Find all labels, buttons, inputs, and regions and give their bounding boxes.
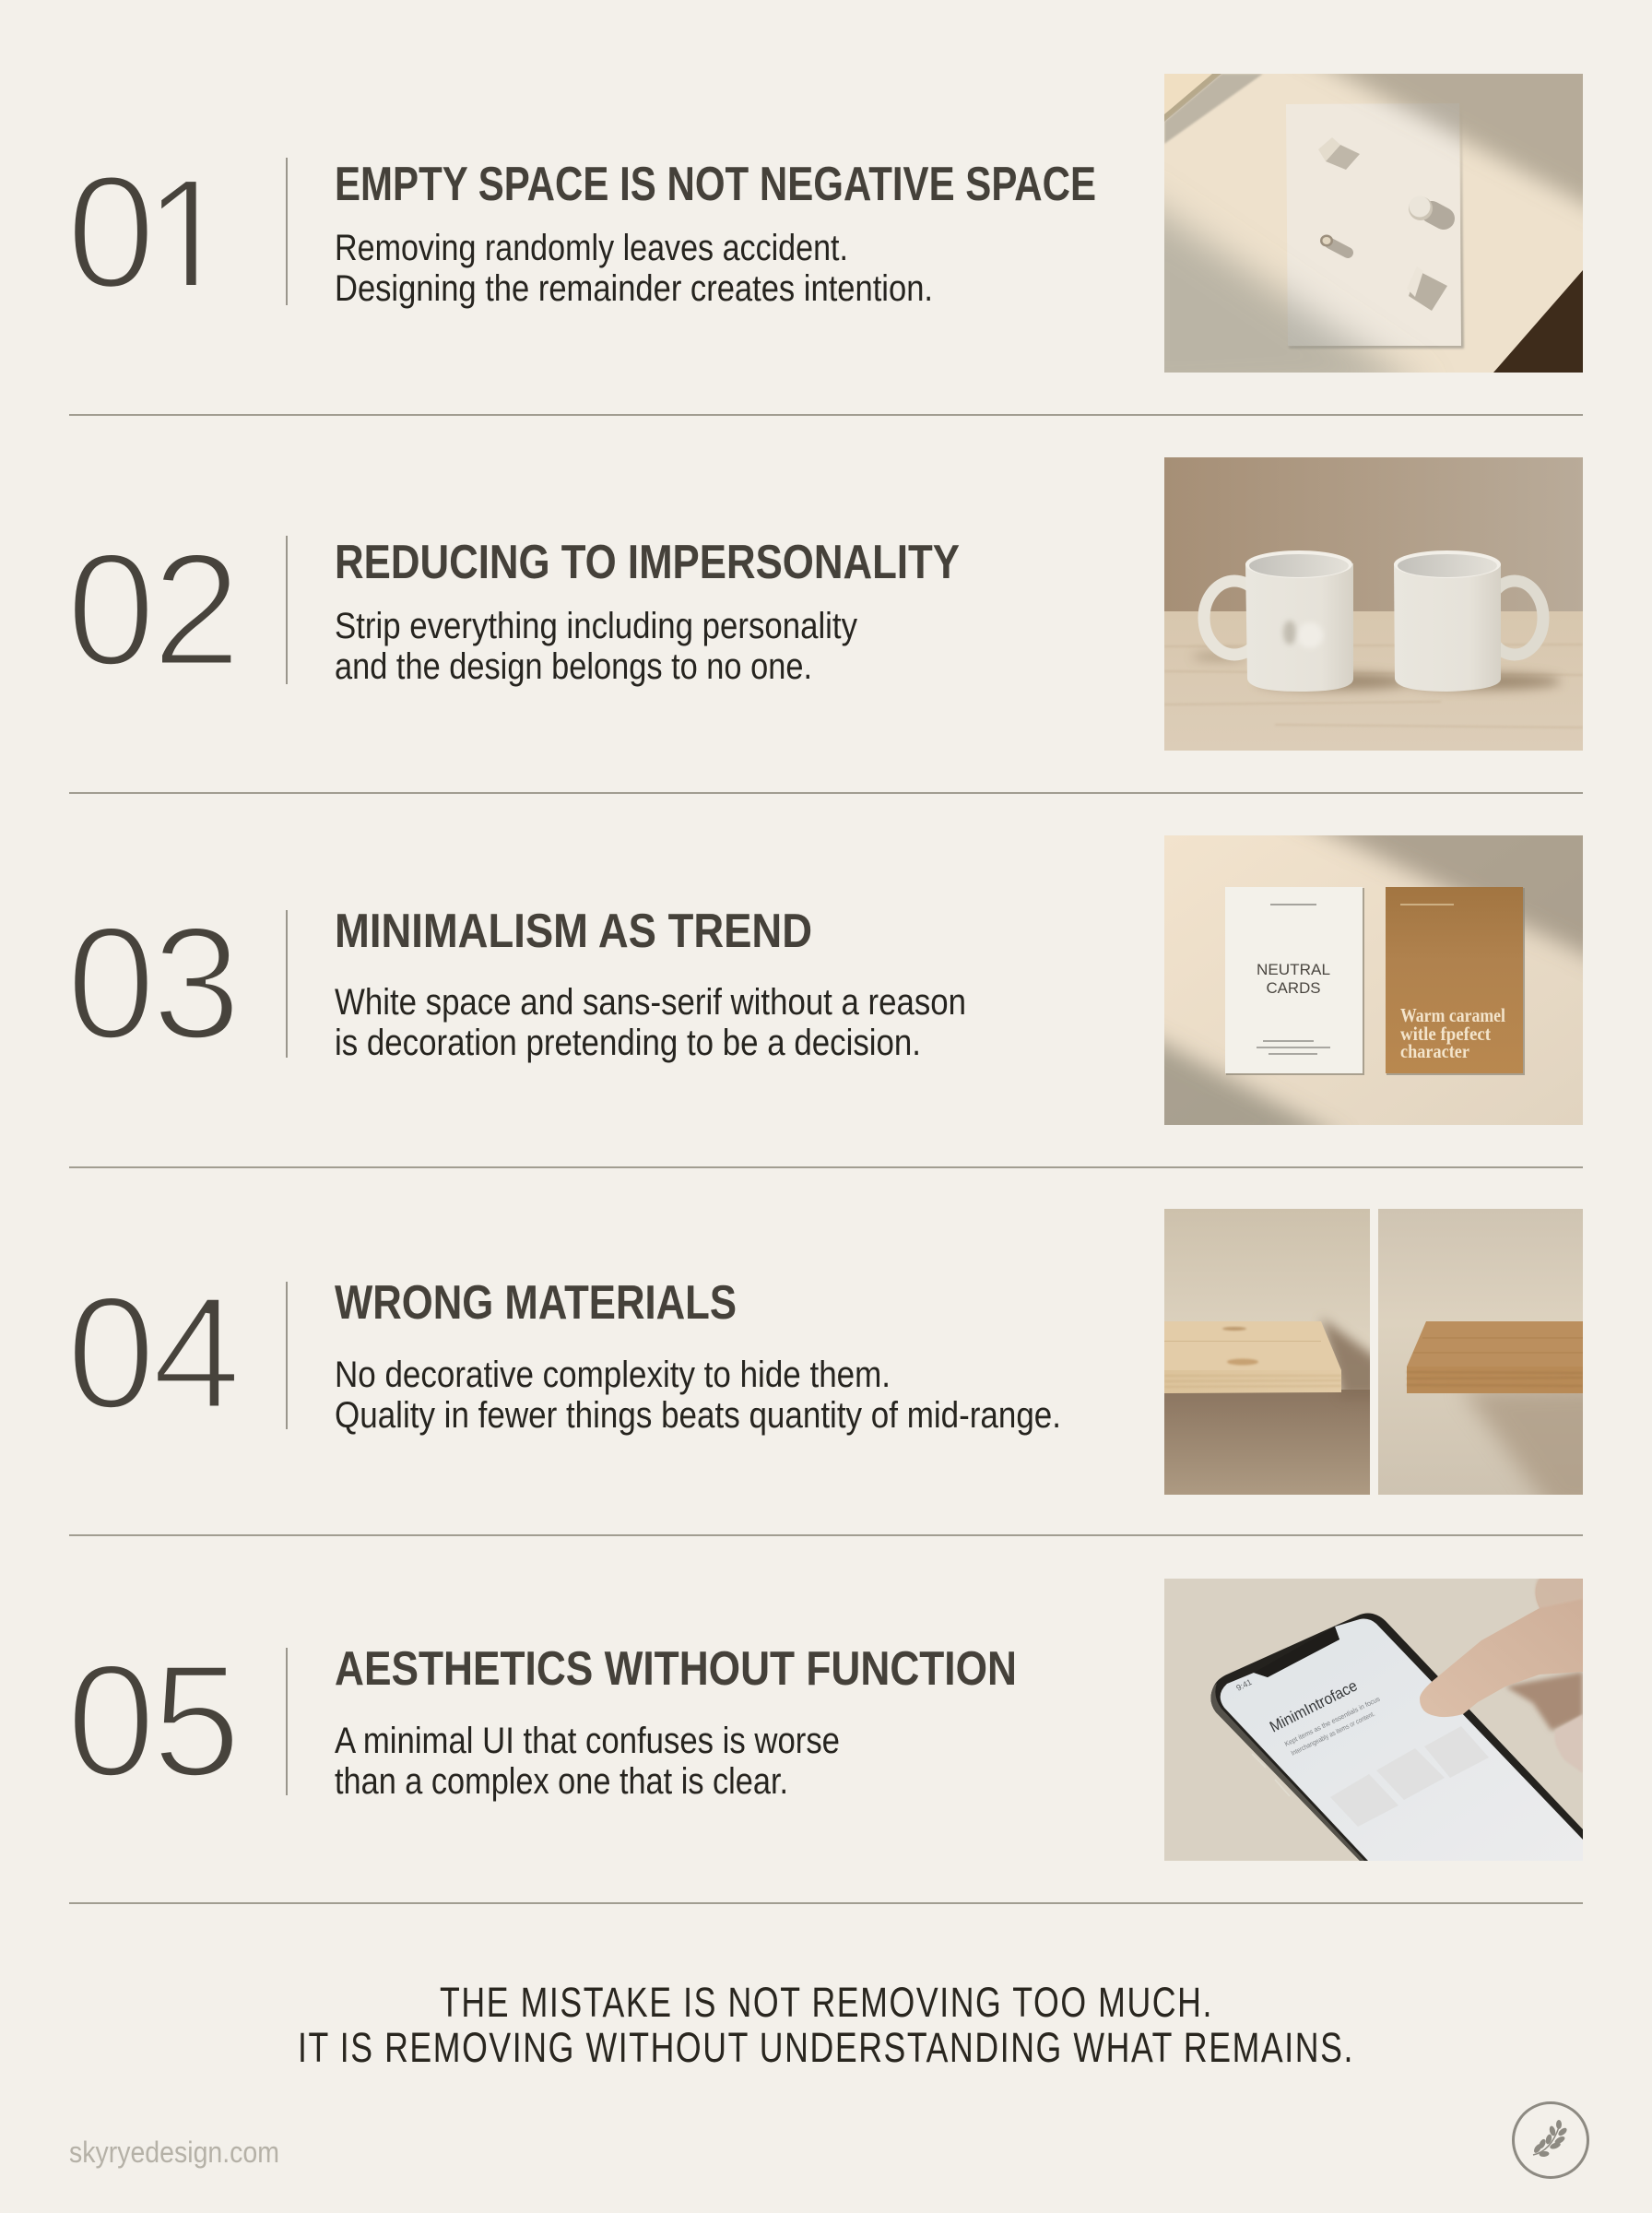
icon: wheat logo: [1514, 2102, 1587, 2178]
separator 4: [69, 1534, 1583, 1536]
neutral card: NEUTRAL: [1257, 961, 1330, 978]
phone UI: 9:41: [1234, 1677, 1254, 1693]
body 01: Designing the remainder creates intention.: [335, 268, 933, 309]
divider 05: [286, 1648, 288, 1795]
heading 01: EMPTY SPACE IS NOT NEGATIVE SPACE: [335, 158, 1096, 211]
caramel card: [1386, 887, 1525, 1075]
caramel card: witle fpefect: [1400, 1023, 1491, 1045]
body 05: A minimal UI that confuses is worse: [335, 1721, 840, 1761]
body 03: is decoration pretending to be a decision.: [335, 1023, 921, 1063]
body 04: No decorative complexity to hide them.: [335, 1355, 891, 1395]
body 01: Removing randomly leaves accident.: [335, 228, 848, 268]
objects on paper: [1318, 137, 1447, 311]
body 03: White space and sans-serif without a reason: [335, 982, 966, 1023]
number 04: 04: [66, 1262, 238, 1442]
body 05: [335, 1721, 840, 1802]
phone UI: Kept items as the essentials in focus: [1283, 1695, 1382, 1748]
caramel card: Warm caramel: [1400, 1004, 1505, 1026]
mug right: [1394, 550, 1543, 692]
phone body: [1210, 1614, 1583, 1861]
closing statement: THE MISTAKE IS NOT REMOVING TOO MUCH.: [440, 1979, 1213, 2026]
separator 1: [69, 414, 1583, 416]
row 05: [66, 1579, 1583, 1861]
closing statement: IT IS REMOVING WITHOUT UNDERSTANDING WHAT REMAINS.: [298, 2024, 1354, 2071]
caramel card: character: [1400, 1040, 1469, 1062]
number 03: 03: [66, 893, 238, 1072]
phone UI: MinimIntroface: [1267, 1676, 1360, 1736]
separator 3: [69, 1166, 1583, 1168]
divider 04: [286, 1282, 288, 1429]
heading 03: MINIMALISM AS TREND: [335, 905, 812, 958]
row 04: [66, 1209, 1609, 1513]
body 02: and the design belongs to no one.: [335, 646, 812, 687]
image: two white mugs on travertine: [1164, 457, 1583, 751]
row 03: [66, 799, 1625, 1154]
number 02: 02: [66, 519, 238, 699]
row 01: [75, 74, 1583, 373]
body 03: [335, 982, 966, 1063]
number 05: 05: [66, 1630, 238, 1810]
body 01: [335, 228, 933, 309]
neutral card: CARDS: [1267, 979, 1320, 997]
divider 03: [286, 910, 288, 1058]
divider 01: [286, 158, 288, 305]
body 05: than a complex one that is clear.: [335, 1761, 788, 1802]
number 01: 0: [66, 142, 152, 321]
image: oak shelf: [1378, 1209, 1583, 1495]
separator 5: [69, 1902, 1583, 1904]
website credit: skyryedesign.com: [69, 2136, 279, 2169]
phone UI: [1234, 1676, 1489, 1827]
body 02: Strip everything including personality: [335, 606, 857, 646]
number 01: 1: [144, 140, 230, 338]
image: neutral and caramel cards: [1164, 835, 1583, 1125]
image: paper with objects in diagonal light: [1164, 74, 1583, 373]
image: phone and pointing finger: [1164, 1579, 1583, 1861]
heading 05: AESTHETICS WITHOUT FUNCTION: [335, 1642, 1017, 1696]
heading 02: REDUCING TO IMPERSONALITY: [335, 536, 960, 589]
mug left: [1204, 550, 1353, 692]
divider 02: [286, 536, 288, 684]
closing statement: [298, 1979, 1354, 2071]
row 02: [66, 457, 1583, 751]
separator 2: [69, 792, 1583, 794]
phone UI: Interchangeably as items or content.: [1290, 1710, 1376, 1757]
hand: [1420, 1579, 1583, 1773]
body 04: Quality in fewer things beats quantity of mid-range.: [335, 1395, 1061, 1436]
body 04: [335, 1355, 1061, 1436]
body 02: [335, 606, 857, 687]
image: pine shelf: [1164, 1209, 1370, 1495]
heading 04: WRONG MATERIALS: [335, 1276, 737, 1330]
neutral card: [1225, 887, 1364, 1075]
number 01: [75, 177, 196, 287]
